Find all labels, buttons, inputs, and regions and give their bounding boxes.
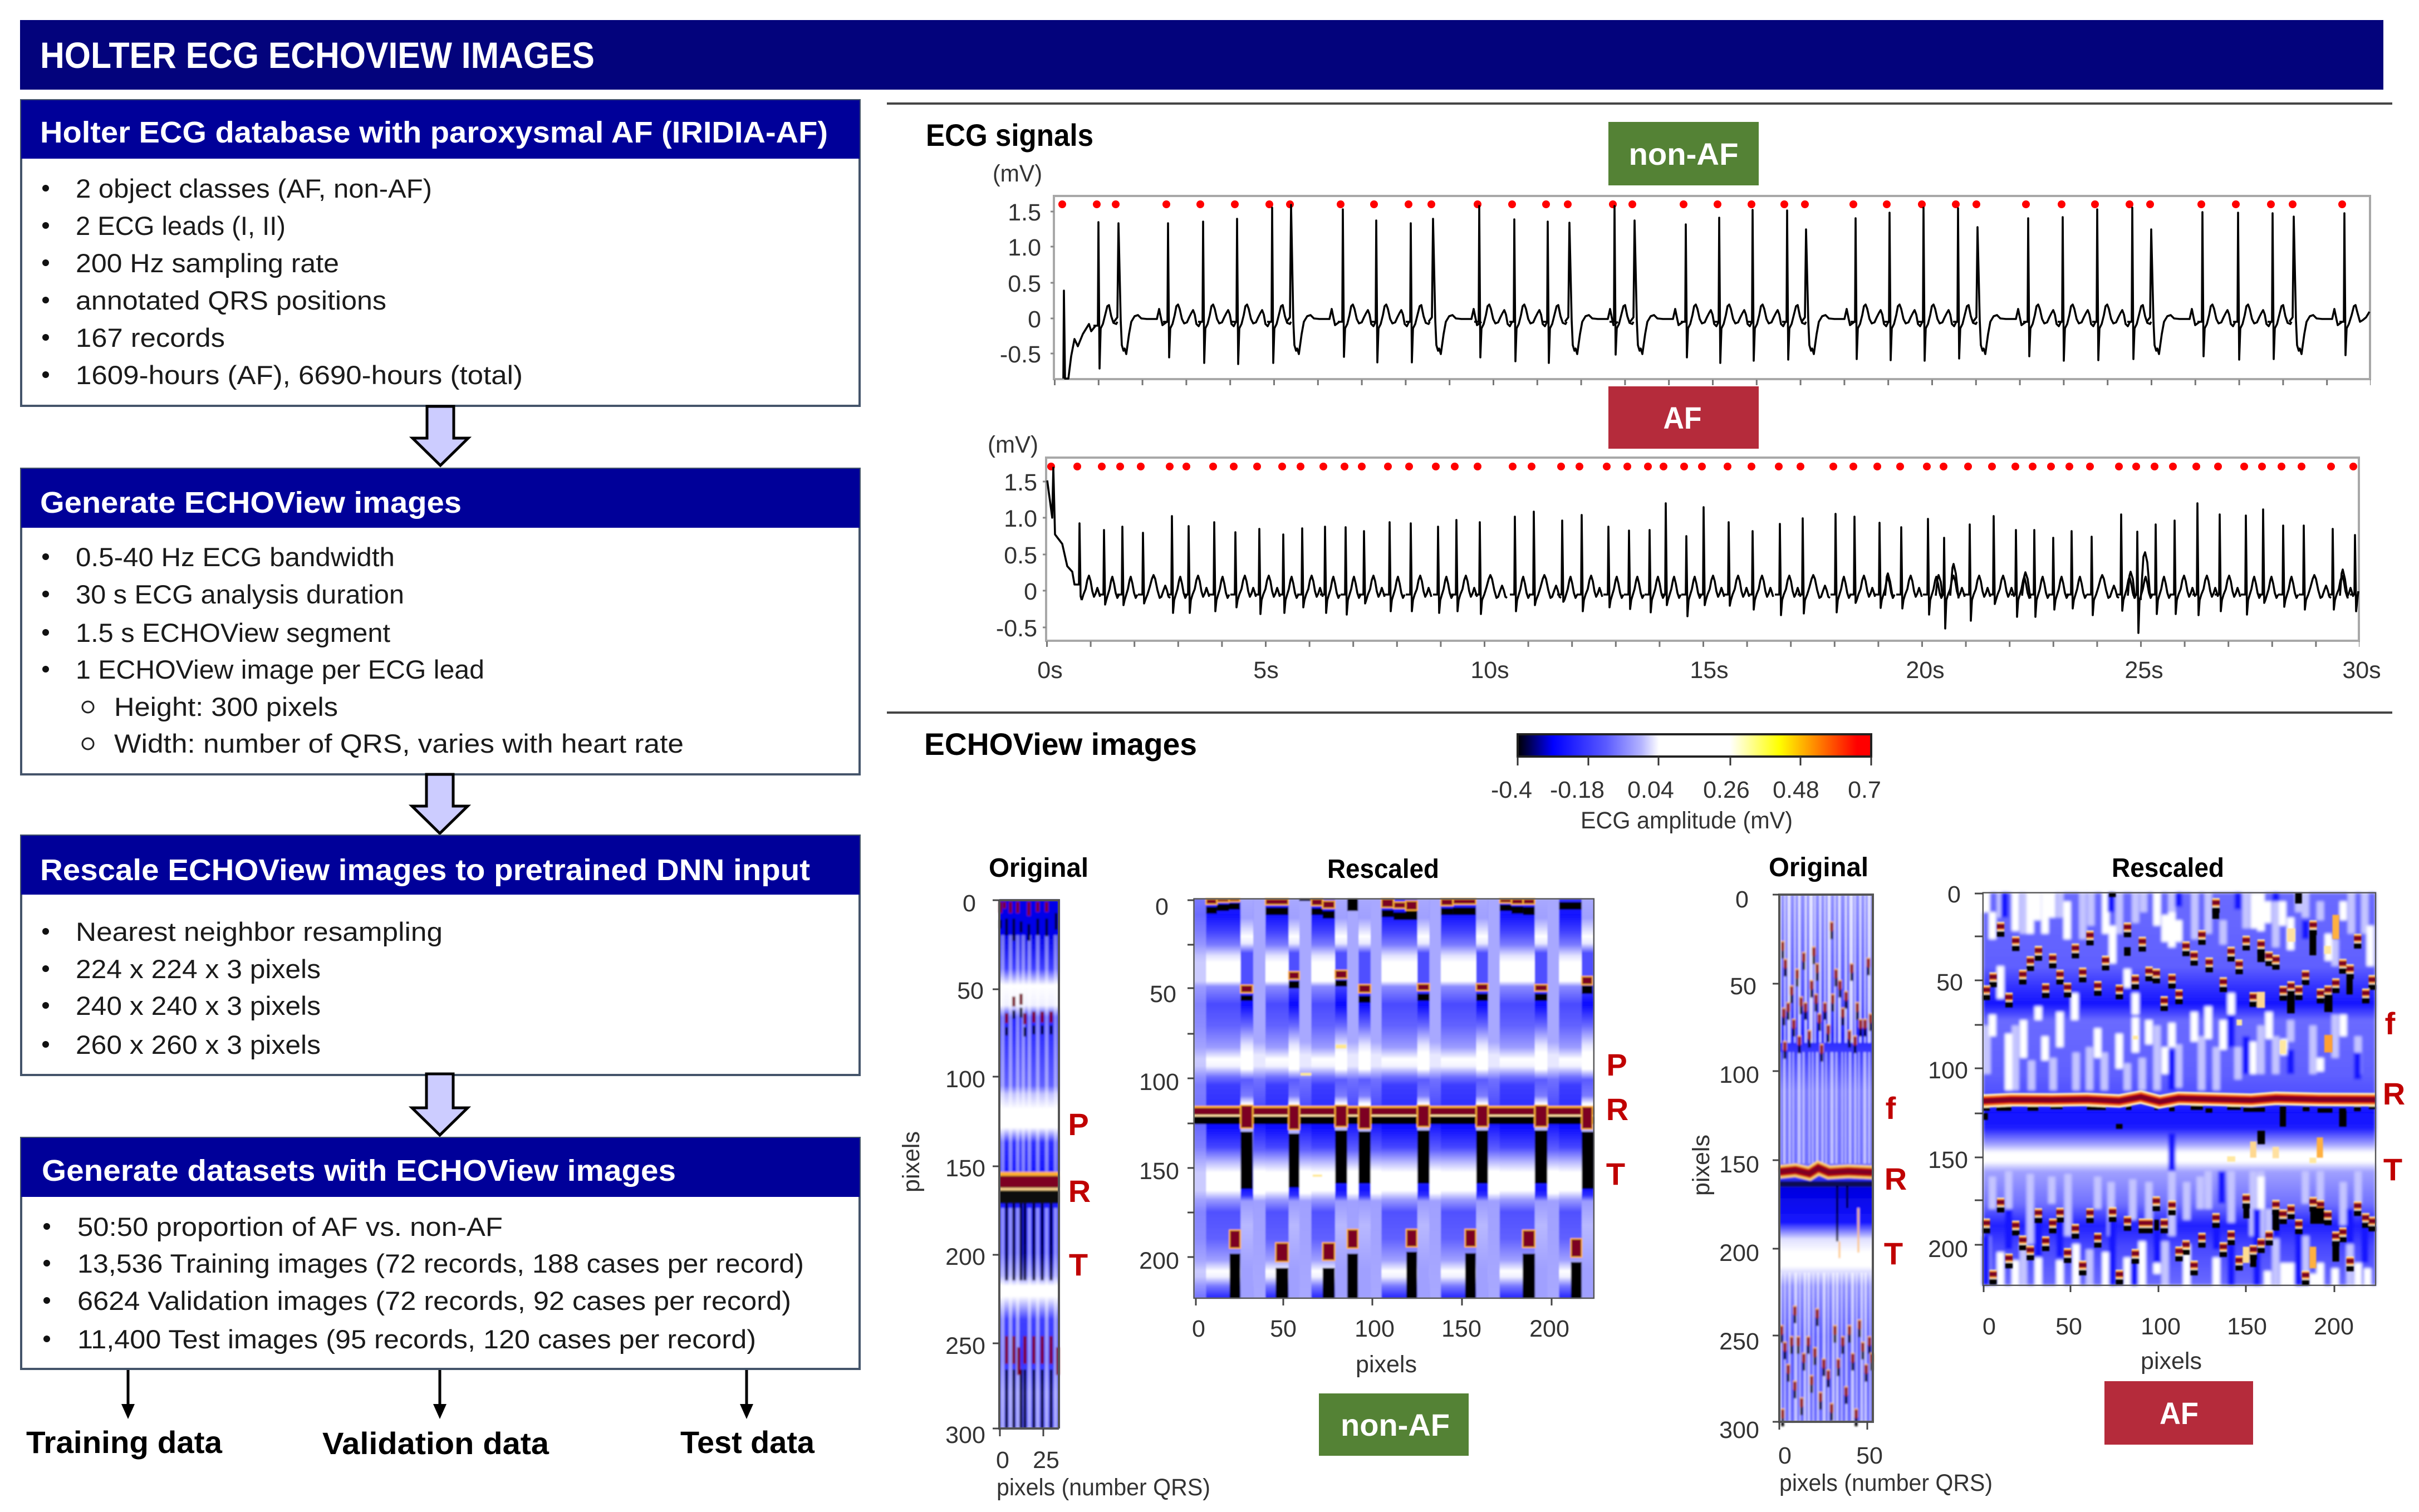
panel: AF Original image: 250 [1719, 1328, 1759, 1355]
heading: ECHOView images: ECHOView images [924, 726, 1197, 762]
chart: AF ECG signal: 1.0 [1004, 505, 1037, 532]
panel: non-AF Rescaled image [1139, 855, 1628, 1378]
bullet list: dataset sizes: 6624 Validation images (72 records, 92 cases per record) [77, 1286, 791, 1315]
label: non-AF signal: non-AF [1629, 136, 1738, 171]
chart: AF ECG signal: (mV) [988, 431, 1038, 458]
panel: non-AF Rescaled image: 50 [1270, 1315, 1297, 1342]
bullet list: database properties: 167 records [76, 323, 225, 352]
output: Validation data: Validation data [322, 1426, 549, 1461]
panel: AF Original image: 50 [1730, 973, 1756, 1000]
time axis labels: 5s [1253, 657, 1279, 684]
colour bar legend: 0.7 [1848, 777, 1881, 803]
colour bar legend: -0.18 [1550, 777, 1605, 803]
panel: Generate ECHOView images [21, 469, 860, 774]
bullet list: generation settings: 1 ECHOView image per ECG lead [76, 655, 484, 684]
bullet list: dataset sizes: 11,400 Test images (95 records, 120 cases per record) [77, 1324, 756, 1354]
panel: AF Rescaled image: 50 [1936, 969, 1963, 996]
bullet list: database properties: 200 Hz sampling rate [76, 248, 339, 278]
panel: AF Rescaled image: 150 [1928, 1147, 1968, 1174]
bullet list: rescale sizes: Nearest neighbor resampling [76, 917, 443, 946]
panel: AF Original image: 300 [1719, 1417, 1759, 1444]
time axis labels: 20s [1906, 657, 1945, 684]
panel: AF Rescaled image: 50 [2055, 1313, 2082, 1340]
panel: non-AF Rescaled image: T [1606, 1156, 1625, 1191]
panel heading: datasets: Generate datasets with ECHOView images [42, 1154, 676, 1187]
trace: AF waveform [1047, 468, 2358, 633]
bullet list: database properties: 1609-hours (AF), 6690-hours (total) [76, 360, 523, 390]
label: non-AF image [1319, 1393, 1469, 1456]
label: non-AF image: non-AF [1341, 1407, 1450, 1442]
panel: AF Rescaled image: Rescaled [2112, 853, 2224, 883]
panel: AF Rescaled image: 100 [1928, 1057, 1968, 1084]
panel: non-AF Rescaled image: P [1606, 1047, 1627, 1082]
panel: non-AF Original image: 0 [963, 890, 976, 917]
time axis labels: 0s [1037, 657, 1063, 684]
panel heading: database: Holter ECG database with paroxysmal AF (IRIDIA-AF) [40, 116, 828, 149]
panel: non-AF Original image: T [1069, 1247, 1088, 1282]
panel: AF Rescaled image [1928, 853, 2405, 1374]
panel: AF Original image: 50 [1856, 1442, 1883, 1469]
panel: AF Rescaled image: 200 [2314, 1313, 2354, 1340]
panel: non-AF Original image: 300 [945, 1422, 985, 1449]
panel: AF Rescaled image: 0 [1947, 881, 1961, 908]
bullet list: database properties: annotated QRS positions [76, 286, 386, 315]
colour bar legend: ECG amplitude (mV) [1581, 807, 1793, 834]
panel: non-AF Rescaled image: 200 [1139, 1248, 1179, 1274]
arrow: rescale to datasets [412, 1074, 468, 1135]
panel: non-AF Original image: R [1068, 1174, 1091, 1209]
chart: non-AF ECG signal: 1.5 [1008, 199, 1041, 226]
label: AF image [2104, 1381, 2253, 1445]
panel: AF Rescaled image: pixels [2141, 1348, 2202, 1374]
chart: non-AF ECG signal: 1.0 [1008, 234, 1041, 261]
colour bar legend: 0.48 [1773, 777, 1819, 803]
chart: non-AF ECG signal: (mV) [993, 160, 1042, 187]
panel: non-AF Rescaled image: R [1606, 1092, 1628, 1127]
time axis labels [1037, 657, 2381, 684]
panel: non-AF Rescaled image: 150 [1139, 1158, 1179, 1185]
panel: non-AF Original image: 200 [945, 1244, 985, 1270]
bullet list: generation settings: 0.5-40 Hz ECG bandwidth [76, 542, 395, 572]
panel: non-AF Rescaled image: 100 [1139, 1069, 1179, 1096]
panel heading: database [21, 100, 860, 159]
panel: non-AF Original image: 0 [996, 1447, 1009, 1474]
panel: AF Original image: pixels [1688, 1135, 1715, 1196]
panel: AF Original image: 100 [1719, 1062, 1759, 1088]
panel heading: datasets [21, 1138, 860, 1197]
panel heading: rescale [21, 836, 860, 895]
time axis labels: 25s [2124, 657, 2163, 684]
panel: non-AF Rescaled image: 200 [1529, 1315, 1569, 1342]
chart: AF ECG signal: 0.5 [1004, 542, 1037, 569]
output: Test data: Test data [680, 1425, 815, 1460]
bullet list: rescale sizes: 224 x 224 x 3 pixels [76, 954, 321, 984]
trace: non-AF waveform [1063, 205, 2369, 379]
colour bar legend: -0.4 [1491, 777, 1532, 803]
bullet list: rescale sizes [42, 917, 443, 1059]
panel: AF Original image [1688, 853, 1993, 1496]
arrow: database to generate [413, 406, 468, 465]
panel: non-AF Rescaled image: 50 [1150, 981, 1176, 1008]
bullet list: dataset sizes: 13,536 Training images (72 records, 188 cases per record) [77, 1249, 804, 1278]
panel: non-AF Rescaled image: 0 [1192, 1315, 1205, 1342]
panel: AF Original image: T [1884, 1236, 1903, 1271]
panel: AF Rescaled image: 100 [2141, 1313, 2181, 1340]
panel heading: generate: Generate ECHOView images [40, 486, 462, 519]
title banner [20, 20, 2383, 90]
panel: AF Rescaled image: T [2383, 1152, 2402, 1187]
panel: AF Original image: 0 [1778, 1442, 1792, 1469]
label: AF signal [1608, 386, 1759, 449]
QRS markers: non-AF [1058, 200, 2346, 208]
colour bar legend [1491, 734, 1881, 834]
panel: AF Rescaled image: R [2383, 1076, 2405, 1111]
bullet list: generation settings: Height: 300 pixels [114, 692, 338, 721]
panel: Rescale ECHOView images [21, 836, 860, 1075]
chart: non-AF ECG signal: 0 [1028, 306, 1041, 333]
panel: non-AF Original image: 100 [945, 1066, 985, 1093]
bullet list: rescale sizes: 240 x 240 x 3 pixels [76, 991, 321, 1020]
panel heading: rescale: Rescale ECHOView images to pretrained DNN input [40, 853, 810, 887]
bullet list: generation settings: 1.5 s ECHOView segment [76, 618, 390, 647]
label: AF image: AF [2160, 1396, 2199, 1431]
panel: non-AF Rescaled image: 100 [1355, 1315, 1395, 1342]
chart: non-AF ECG signal [993, 160, 2371, 382]
bullet list: database properties: 2 object classes (AF, non-AF) [76, 174, 432, 203]
arrow: generate to rescale [412, 774, 468, 833]
panel: AF Original image: pixels (number QRS) [1779, 1470, 1993, 1496]
label: AF signal: AF [1664, 400, 1701, 435]
bullet list: dataset sizes: 50:50 proportion of AF vs. non-AF [77, 1212, 503, 1241]
QRS markers: AF [1047, 463, 2357, 470]
chart: non-AF ECG signal: 0.5 [1008, 271, 1041, 297]
panel: non-AF Original image: 25 [1033, 1447, 1059, 1474]
panel: non-AF Original image: P [1068, 1107, 1089, 1142]
title banner: HOLTER ECG ECHOVIEW IMAGES [40, 35, 595, 76]
panel: non-AF Rescaled image: 150 [1441, 1315, 1481, 1342]
panel: non-AF Original image: pixels [898, 1131, 925, 1192]
panel: AF Rescaled image: 200 [1928, 1236, 1968, 1263]
panel: AF Original image: 150 [1719, 1151, 1759, 1178]
bullet list: generation settings: Width: number of QRS, varies with heart rate [114, 729, 684, 758]
time axis labels: 10s [1470, 657, 1509, 684]
colour bar legend: 0.04 [1627, 777, 1674, 803]
panel: AF Rescaled image: 0 [1983, 1313, 1996, 1340]
output: Training data [26, 1370, 223, 1460]
panel: non-AF Original image: Original [989, 853, 1088, 883]
heading: ECG signals: ECG signals [926, 117, 1093, 153]
panel: AF Original image: R [1885, 1161, 1907, 1196]
bullet list: database properties [42, 174, 523, 390]
chart: AF ECG signal: -0.5 [996, 615, 1037, 642]
colour bar legend: 0.26 [1703, 777, 1750, 803]
panel: non-AF Original image: 150 [945, 1155, 985, 1182]
chart: AF ECG signal [988, 431, 2381, 684]
panel: non-AF Original image: 250 [945, 1333, 985, 1359]
bullet list: generation settings [42, 542, 684, 758]
panel: AF Original image: f [1886, 1091, 1896, 1126]
bullet list: generation settings: 30 s ECG analysis duration [76, 580, 404, 609]
panel: AF Rescaled image: f [2385, 1006, 2396, 1041]
panel: Generate datasets [21, 1138, 860, 1369]
output: Validation data [322, 1370, 549, 1461]
chart: AF ECG signal: 1.5 [1004, 469, 1037, 496]
panel: non-AF Original image: 50 [957, 978, 984, 1004]
panel: AF Original image: 0 [1735, 886, 1749, 913]
bullet list: dataset sizes [43, 1212, 804, 1354]
panel: non-AF Rescaled image: Rescaled [1327, 855, 1439, 884]
chart: non-AF ECG signal: -0.5 [1000, 341, 1041, 368]
bullet list: database properties: 2 ECG leads (I, II) [76, 211, 286, 240]
panel heading: generate [21, 469, 860, 528]
time axis labels: 15s [1690, 657, 1729, 684]
time axis labels: 30s [2342, 657, 2381, 684]
panel: Holter ECG database [21, 100, 860, 406]
panel: non-AF Rescaled image: pixels [1356, 1351, 1417, 1378]
chart: AF ECG signal: 0 [1024, 578, 1037, 605]
panel: AF Rescaled image: 150 [2227, 1313, 2267, 1340]
output: Training data: Training data [26, 1425, 223, 1460]
panel: AF Original image: 200 [1719, 1240, 1759, 1266]
panel: AF Original image: Original [1769, 853, 1868, 882]
label: non-AF signal [1608, 122, 1759, 185]
bullet list: rescale sizes: 260 x 260 x 3 pixels [76, 1030, 321, 1059]
output: Test data [680, 1370, 815, 1460]
panel: non-AF Rescaled image: 0 [1155, 894, 1169, 920]
panel: non-AF Original image [898, 853, 1210, 1501]
panel: non-AF Original image: pixels (number QRS) [997, 1474, 1210, 1501]
